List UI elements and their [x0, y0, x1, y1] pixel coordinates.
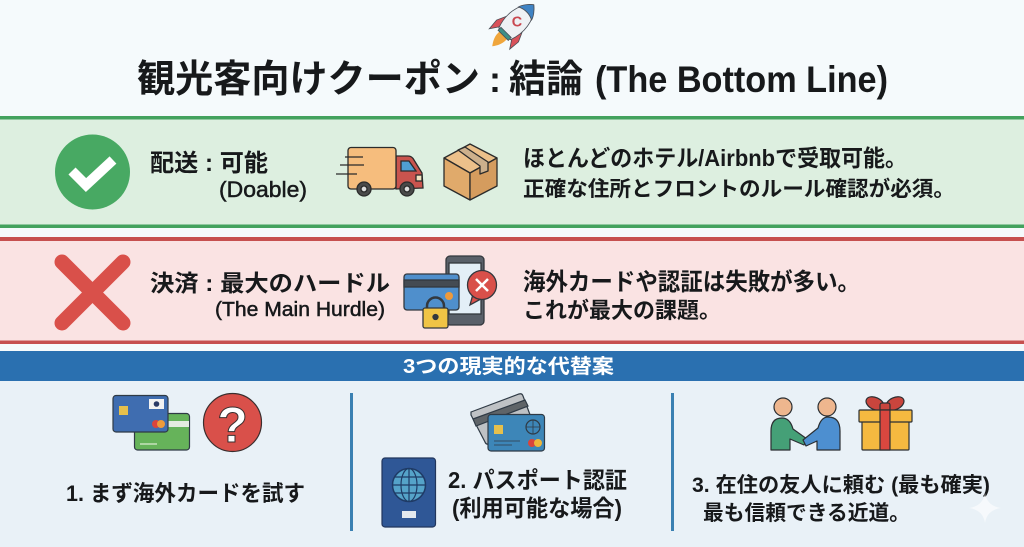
option 1 label: 1. まず海外カードを試す	[66, 481, 305, 506]
banner: alternatives heading	[0, 351, 1024, 381]
icon: handshake	[771, 398, 840, 450]
payment heading: 決済 : 最大のハードル	[150, 270, 390, 296]
icon: green check	[55, 134, 130, 210]
title	[137, 59, 888, 101]
title: (The Bottom Line)	[595, 59, 888, 100]
icon: gift	[859, 394, 912, 450]
icon: credit cards	[113, 396, 190, 450]
panel: option 2	[382, 394, 627, 527]
icon: cardboard box	[444, 144, 497, 200]
panel: option 1	[66, 394, 305, 506]
option 3 label: 最も信頼できる近道。	[703, 502, 910, 525]
payment subheading: (The Main Hurdle)	[215, 299, 385, 321]
delivery description: ほとんどのホテル/Airbnbで受取可能。	[523, 145, 907, 171]
title: :	[489, 59, 501, 100]
option 2 label	[448, 467, 627, 521]
payment description	[523, 268, 860, 323]
option 3 label: 3. 在住の友人に頼む (最も確実)	[692, 474, 990, 497]
panel: payment	[0, 237, 1024, 344]
delivery heading: 配送 : 可能	[150, 150, 268, 177]
delivery subheading: (Doable)	[219, 177, 307, 202]
delivery description	[523, 145, 955, 201]
option 2 label: (利用可能な場合)	[452, 495, 622, 521]
option 3 label	[692, 474, 990, 525]
title: 観光客向けクーポン	[137, 59, 480, 101]
icon: question mark	[204, 394, 262, 453]
payment description: これが最大の課題。	[523, 298, 721, 323]
icon: question mark: ?	[217, 397, 248, 453]
icon: delivery truck	[336, 148, 423, 196]
icon: rocket	[481, 0, 545, 57]
divider lines	[350, 393, 674, 531]
icon: passport	[382, 458, 436, 527]
icon: red cross	[62, 262, 123, 323]
panel: delivery	[0, 116, 1024, 228]
payment description: 海外カードや認証は失敗が多い。	[523, 268, 860, 296]
panel: option 3	[692, 394, 990, 525]
banner: alternatives heading: 3つの現実的な代替案	[403, 355, 614, 378]
delivery description: 正確な住所とフロントのルール確認が必須。	[523, 177, 955, 201]
option 2 label: 2. パスポート認証	[448, 467, 627, 493]
icon: card, phone and lock	[404, 256, 496, 328]
title: 結論	[509, 59, 583, 101]
icon: two cards	[471, 394, 544, 451]
icon: rocket: C	[512, 15, 523, 31]
sparkle watermark	[969, 493, 1001, 523]
